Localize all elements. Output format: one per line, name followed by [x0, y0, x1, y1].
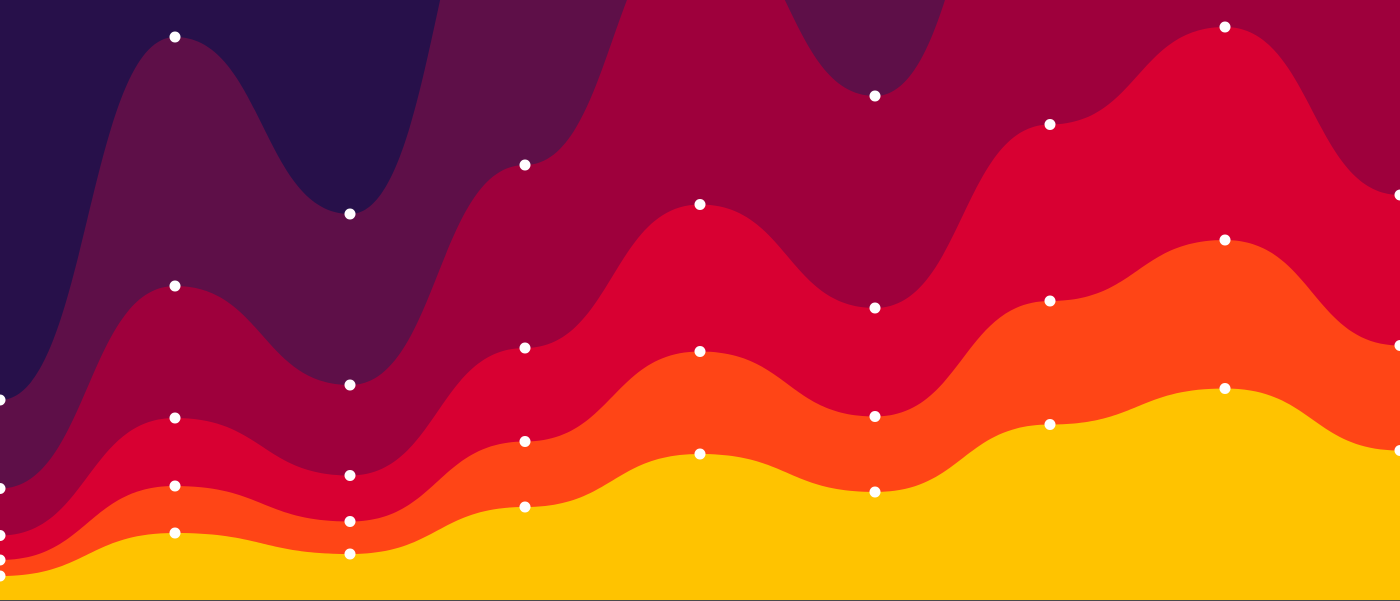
area: yellow series — [0, 388, 1400, 601]
area: orange series — [0, 240, 1400, 601]
markers: crimson series — [0, 90, 880, 494]
baseline axis — [0, 600, 1400, 601]
markers: orange series — [0, 234, 1400, 566]
markers: yellow series — [0, 383, 1400, 582]
markers: plum series — [0, 32, 356, 406]
